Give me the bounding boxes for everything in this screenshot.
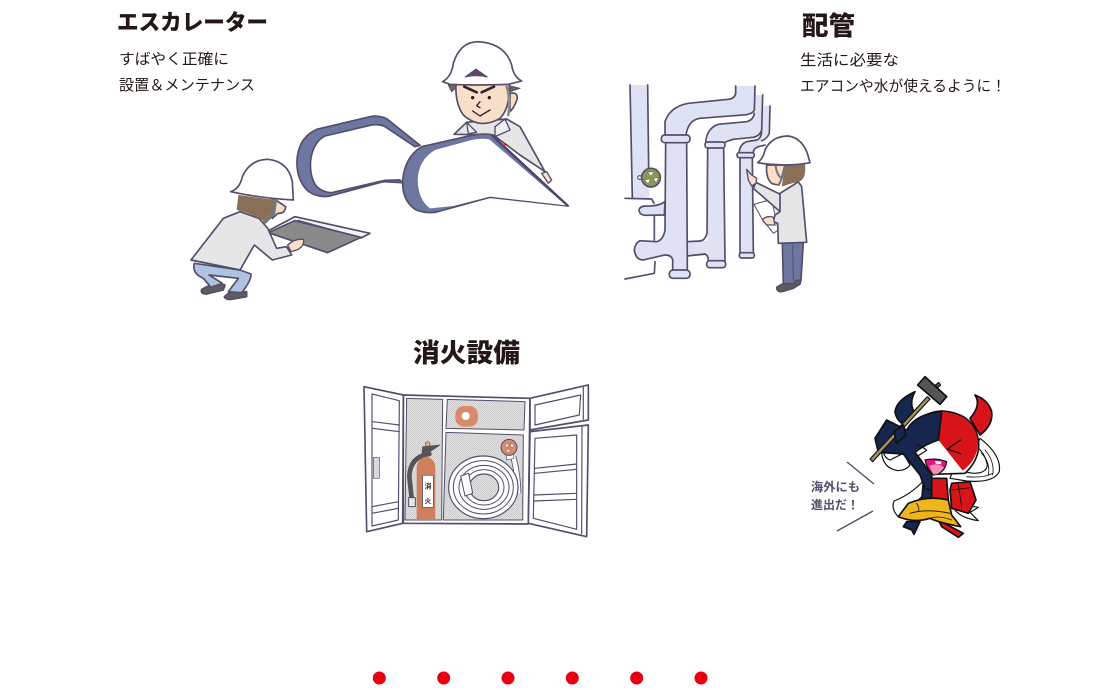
icon: hose nozzle [501, 439, 517, 460]
figure: crouching worker at hatch [191, 159, 370, 299]
heading: piping: 配管 [802, 11, 855, 41]
mascot: arm and fist [875, 412, 942, 490]
door: left [364, 387, 403, 532]
illustration: mascot with hammer [870, 377, 1000, 537]
pipe: main with left branch [634, 86, 755, 278]
door: lower right [528, 425, 588, 537]
mascot: legs, body and skirt [898, 478, 963, 537]
icon: coiled hose [449, 456, 518, 519]
icon: hose ring [455, 406, 478, 427]
illustration: escalator [297, 116, 568, 213]
text block: piping description [800, 52, 1006, 95]
mascot: flowing hair [882, 438, 1000, 521]
text block: piping description: エアコンや水が使えるように！ [800, 78, 1006, 95]
heading: escalator: エスカレーター [117, 10, 268, 35]
pipe: far right [737, 106, 770, 258]
illustration: pipes and worker [625, 85, 810, 292]
icon: green valve [638, 168, 660, 187]
mascot: red glove [950, 482, 976, 513]
text block: piping description: 生活に必要な [800, 52, 899, 69]
icon: fire extinguisher: 火 [425, 497, 432, 505]
escalator: back handrail [297, 116, 420, 197]
text block: escalator description: すばやく正確に [119, 51, 229, 68]
callout: overseas expansion: 海外にも [811, 479, 860, 494]
pipe: left vertical with base [625, 85, 665, 279]
figure: standing worker [443, 42, 552, 183]
callout: overseas expansion: 進出だ！ [811, 497, 859, 512]
heading: fire equipment: 消火設備 [413, 338, 520, 368]
cabinet body [403, 395, 530, 524]
mascot: face [917, 440, 961, 475]
icon: fire extinguisher: 消 [425, 481, 432, 490]
illustration: fire cabinet [364, 385, 588, 537]
text block: escalator description: 設置＆メンテナンス [119, 77, 255, 94]
panel: mascot [811, 377, 1000, 537]
panel: escalator [117, 10, 568, 299]
pagination dots [373, 672, 708, 684]
panel: piping [625, 11, 1006, 292]
text block: escalator description [119, 51, 255, 94]
door: upper right [530, 385, 588, 430]
escalator: front handrail [403, 134, 568, 213]
mascot: horns [895, 392, 992, 435]
mascot: head base [909, 411, 979, 474]
icon: hammer [870, 377, 947, 462]
pipe: middle [685, 95, 763, 268]
figure: inspecting worker [747, 136, 810, 292]
panel: fire equipment [364, 338, 588, 537]
callout: overseas expansion [811, 462, 874, 531]
icon: fire extinguisher [409, 442, 440, 520]
